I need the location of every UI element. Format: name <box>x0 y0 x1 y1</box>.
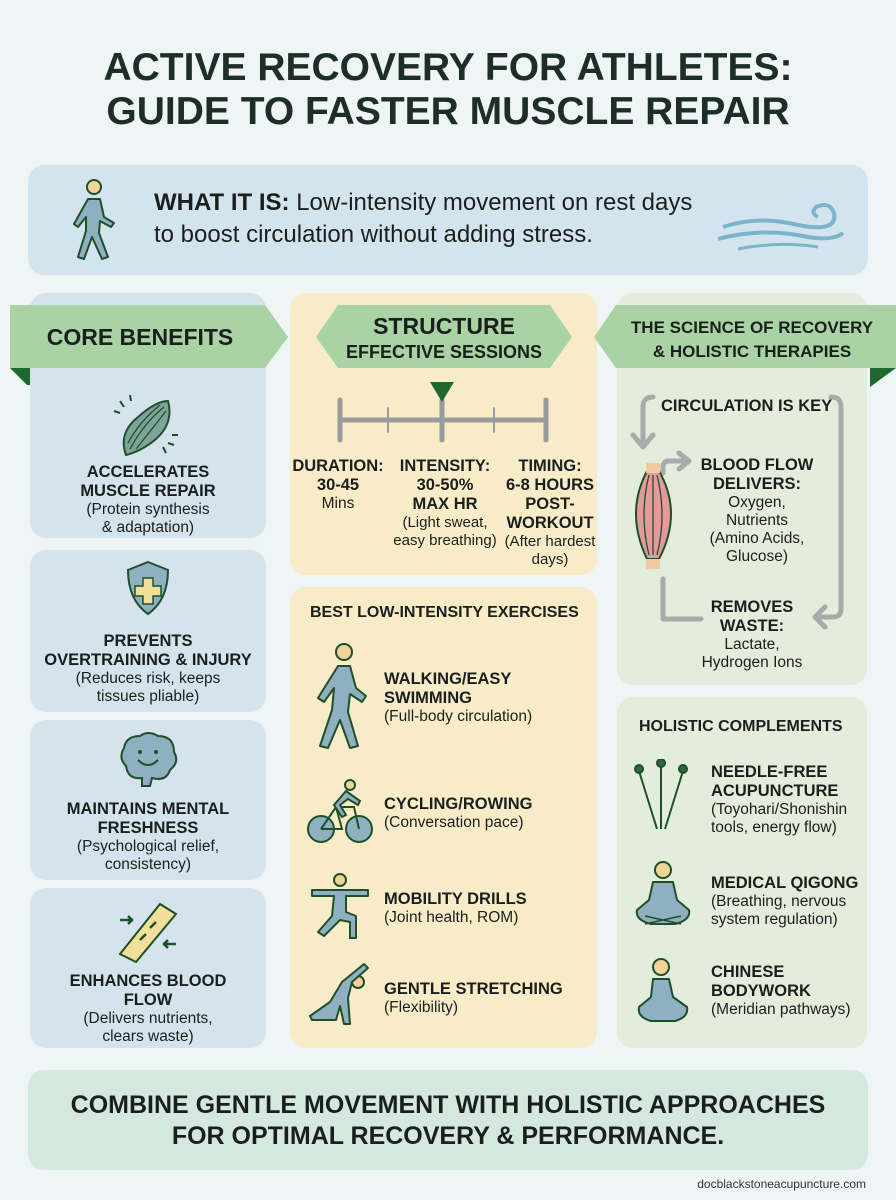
text: timing: days) <box>532 551 568 568</box>
text: timing: WORKOUT <box>506 514 594 532</box>
text: duration: Mins <box>322 495 354 512</box>
text: timing: 6-8 HOURS <box>506 476 594 494</box>
text: removes waste: Hydrogen Ions <box>702 654 802 671</box>
card: prevents overtraining: tissues pliable) <box>97 688 199 705</box>
text: intensity: INTENSITY: <box>400 457 490 475</box>
item: qigong: MEDICAL QIGONG <box>711 874 858 892</box>
text: removes waste <box>702 598 802 671</box>
icon: walking person <box>73 179 115 260</box>
panel: science <box>617 293 867 685</box>
card: prevents overtraining: OVERTRAINING & INJURY <box>44 651 252 669</box>
item: walking: (Full-body circulation) <box>384 708 532 725</box>
text: blood flow delivers: BLOOD FLOW <box>701 456 813 474</box>
text: intensity <box>393 457 497 549</box>
item: walking: SWIMMING <box>384 689 472 707</box>
item: cycling <box>307 779 532 843</box>
card: mental freshness: MAINTAINS MENTAL <box>67 800 229 818</box>
title: GUIDE TO FASTER MUSCLE REPAIR <box>106 90 790 133</box>
item: bodywork: (Meridian pathways) <box>711 1001 851 1018</box>
panel: exercises <box>290 587 597 1048</box>
chart: intensity scale <box>338 382 548 442</box>
banner: structure: STRUCTURE <box>373 313 515 339</box>
text: removes waste: REMOVES <box>711 598 793 616</box>
item: qigong <box>636 861 858 928</box>
bottom banner: COMBINE GENTLE MOVEMENT WITH HOLISTIC APPROACHES <box>71 1091 825 1119</box>
heading: HOLISTIC COMPLEMENTS <box>639 718 843 735</box>
item: mobility <box>311 873 527 939</box>
text: definition <box>154 189 692 248</box>
text: intensity: 30-50% <box>417 476 473 494</box>
card: mental freshness: FRESHNESS <box>98 819 198 837</box>
banner: core benefits: CORE BENEFITS <box>47 324 233 350</box>
text: duration: 30-45 <box>317 476 359 494</box>
text: circulation is key: CIRCULATION IS KEY <box>661 397 832 415</box>
diagram: circulation loop <box>630 394 844 630</box>
text: accelerates muscle repair: & adaptation) <box>102 519 194 536</box>
bottom banner: FOR OPTIMAL RECOVERY & PERFORMANCE. <box>172 1122 724 1150</box>
card: mental freshness: consistency) <box>105 856 191 873</box>
text: blood flow delivers: Nutrients <box>726 512 788 529</box>
card: blood flow: FLOW <box>124 991 172 1009</box>
text: blood flow delivers: Oxygen, <box>728 494 786 511</box>
card: prevents overtraining: (Reduces risk, keeps <box>76 670 220 687</box>
card: prevents overtraining <box>30 550 266 712</box>
item: qigong: (Breathing, nervous <box>711 893 846 910</box>
card: mental freshness: (Psychological relief, <box>77 838 219 855</box>
banner: science: THE SCIENCE OF RECOVERY <box>631 318 874 337</box>
text: accelerates muscle repair <box>80 463 216 536</box>
item: mobility: MOBILITY DRILLS <box>384 890 527 908</box>
bottom banner <box>28 1070 868 1170</box>
panel: holistic complements <box>617 697 867 1048</box>
text: definition: to boost circulation without adding stress. <box>154 221 593 248</box>
card: blood flow: (Delivers nutrients, <box>83 1010 213 1027</box>
banner: science <box>594 305 896 387</box>
icon: wind waves <box>718 203 844 250</box>
panel: structure <box>290 293 597 575</box>
title: ACTIVE RECOVERY FOR ATHLETES: <box>103 46 793 89</box>
text: intensity: MAX HR <box>412 495 478 513</box>
item: qigong: system regulation) <box>711 911 838 928</box>
text: accelerates muscle repair: (Protein synthesis <box>86 501 210 518</box>
banner: core benefits <box>10 305 288 385</box>
text: timing: POST- <box>525 495 575 513</box>
item: cycling: CYCLING/ROWING <box>384 795 532 813</box>
banner: structure: EFFECTIVE SESSIONS <box>346 342 542 362</box>
item: stretching: (Flexibility) <box>384 999 458 1016</box>
text: accelerates muscle repair: ACCELERATES <box>87 463 209 481</box>
text: blood flow delivers: Glucose) <box>726 548 788 565</box>
text: intensity: (Light sweat, <box>402 514 488 531</box>
item: bodywork: BODYWORK <box>711 982 811 1000</box>
icon: muscle <box>114 394 178 456</box>
text: timing: (After hardest <box>505 533 595 550</box>
text: blood flow delivers: (Amino Acids, <box>710 530 804 547</box>
text: timing: TIMING: <box>518 457 582 475</box>
card: blood flow <box>30 888 266 1048</box>
banner: structure <box>316 305 572 368</box>
footer url: docblackstoneacupuncture.com <box>697 1177 866 1191</box>
text: removes waste: Lactate, <box>724 636 780 653</box>
text: removes waste: WASTE: <box>720 617 784 635</box>
panel: core benefits <box>30 293 266 538</box>
text: timing <box>505 457 596 568</box>
card: prevents overtraining: PREVENTS <box>104 632 192 650</box>
item: walking <box>317 643 532 749</box>
text: intensity: easy breathing) <box>393 532 497 549</box>
item: bodywork <box>638 958 851 1022</box>
icon: shield <box>127 560 169 616</box>
text: blood flow delivers: DELIVERS: <box>713 475 801 493</box>
item: stretching: GENTLE STRETCHING <box>384 980 563 998</box>
item: acupuncture <box>634 759 847 836</box>
banner: science: & HOLISTIC THERAPIES <box>653 342 851 361</box>
text: duration <box>292 457 384 512</box>
text: definition: WHAT IT IS: Low-intensity movement on rest days <box>154 189 692 216</box>
heading: BEST LOW-INTENSITY EXERCISES <box>310 604 579 621</box>
icon: brain <box>120 732 178 787</box>
text: accelerates muscle repair: MUSCLE REPAIR <box>80 482 216 500</box>
item: cycling: (Conversation pace) <box>384 814 524 831</box>
item: walking: WALKING/EASY <box>384 670 511 688</box>
item: acupuncture: tools, energy flow) <box>711 819 837 836</box>
item: mobility: (Joint health, ROM) <box>384 909 518 926</box>
card: blood flow: clears waste) <box>102 1028 194 1045</box>
panel: what it is <box>28 165 868 275</box>
title <box>103 46 793 133</box>
item: stretching <box>309 963 563 1025</box>
item: bodywork: CHINESE <box>711 963 784 981</box>
card: mental freshness <box>30 720 266 880</box>
text: duration: DURATION: <box>292 457 384 475</box>
text: blood flow delivers <box>701 456 814 565</box>
icon: blood vessel <box>118 902 178 964</box>
item: acupuncture: (Toyohari/Shonishin <box>711 801 847 818</box>
item: acupuncture: ACUPUNCTURE <box>711 782 838 800</box>
card: blood flow: ENHANCES BLOOD <box>70 972 226 990</box>
item: acupuncture: NEEDLE-FREE <box>711 763 827 781</box>
